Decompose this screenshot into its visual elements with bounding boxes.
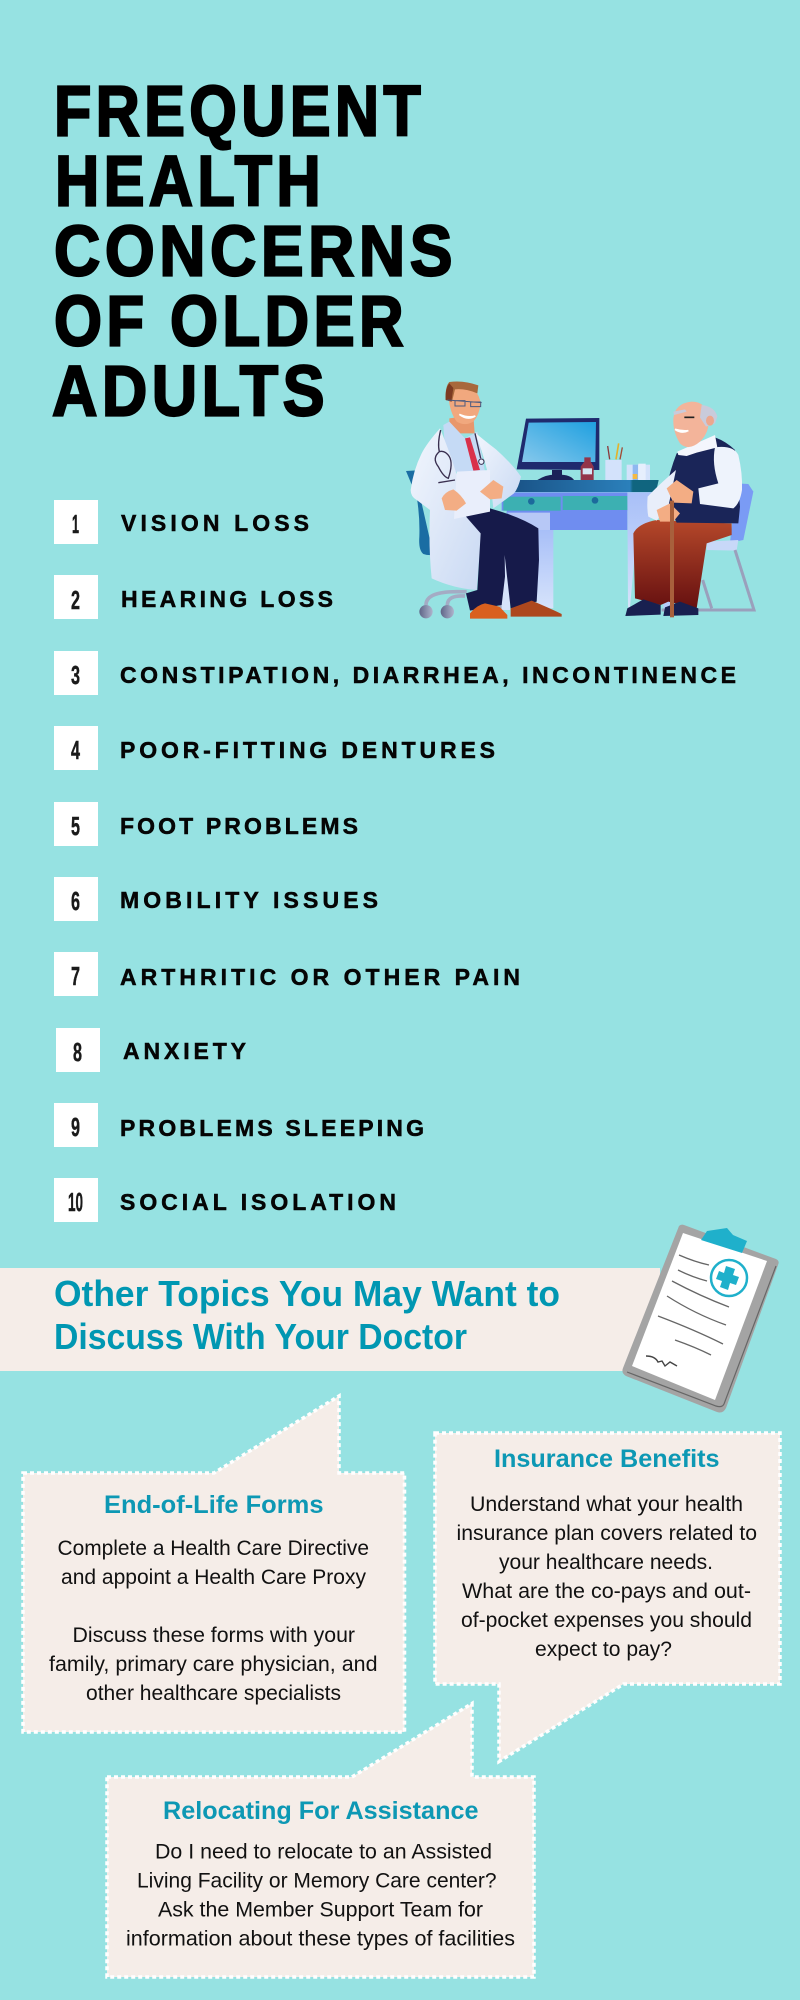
patient <box>625 402 742 617</box>
title: ADULTS <box>52 352 329 432</box>
desk items: bottle, pens, box <box>581 443 650 480</box>
callout body: and appoint a Health Care Proxy <box>61 1566 366 1589</box>
item 1: 1 <box>72 509 79 539</box>
item 4 <box>54 726 495 770</box>
callout body <box>126 1840 515 1950</box>
item 8: 8 <box>73 1037 82 1067</box>
callout body <box>49 1537 378 1705</box>
item 4: POOR-FITTING DENTURES <box>120 737 495 763</box>
title: HEALTH <box>55 142 325 222</box>
callout body: Do I need to relocate to an Assisted <box>155 1840 492 1864</box>
title: FREQUENT <box>54 72 425 152</box>
title: CONCERNS <box>54 212 457 292</box>
callout body: Complete a Health Care Directive <box>58 1537 369 1560</box>
banner heading: Discuss With Your Doctor <box>54 1316 467 1357</box>
item 1: VISION LOSS <box>121 510 309 536</box>
callout: relocating for assistance <box>107 1704 534 1977</box>
doctor's chair <box>406 470 506 618</box>
callout heading: Insurance Benefits <box>494 1445 720 1473</box>
banner heading: Other Topics You May Want to <box>54 1273 560 1314</box>
callout body: expect to pay? <box>535 1638 672 1661</box>
callout: end-of-life forms <box>23 1396 404 1732</box>
item 10: 10 <box>68 1187 83 1217</box>
callout body: your healthcare needs. <box>499 1551 713 1574</box>
callout body: other healthcare specialists <box>86 1682 341 1705</box>
item 3 <box>54 651 736 695</box>
item 3: 3 <box>71 660 80 690</box>
item 2: HEARING LOSS <box>121 586 333 612</box>
callout body: Ask the Member Support Team for <box>158 1898 483 1922</box>
item 8: ANXIETY <box>123 1038 246 1064</box>
illustration: doctor and older patient at a desk <box>406 381 754 619</box>
doctor <box>411 381 562 619</box>
item 5 <box>54 802 358 846</box>
item 1 <box>54 500 309 544</box>
callout body: information about these types of facilities <box>126 1928 515 1950</box>
list of ten health concerns <box>54 500 736 1222</box>
item 8 <box>56 1028 246 1072</box>
monitor <box>517 418 599 480</box>
callout body: What are the co-pays and out- <box>462 1580 751 1603</box>
callout heading: End-of-Life Forms <box>104 1491 324 1519</box>
item 7: ARTHRITIC OR OTHER PAIN <box>120 964 520 990</box>
banner: other topics <box>0 1268 660 1371</box>
callout body: family, primary care physician, and <box>49 1653 378 1676</box>
desk <box>502 480 659 610</box>
item 10 <box>54 1178 396 1222</box>
callout body <box>456 1493 757 1661</box>
icon: clipboard <box>622 1225 779 1412</box>
item 2 <box>54 575 333 619</box>
item 2: 2 <box>71 585 80 615</box>
item 7: 7 <box>71 961 80 991</box>
item 9: PROBLEMS SLEEPING <box>120 1115 424 1141</box>
item 5: 5 <box>71 811 80 841</box>
item 3: CONSTIPATION, DIARRHEA, INCONTINENCE <box>120 662 736 688</box>
patient's chair <box>662 483 754 610</box>
item 5: FOOT PROBLEMS <box>120 813 358 839</box>
item 4: 4 <box>71 735 80 765</box>
callout: insurance benefits <box>435 1433 780 1762</box>
callout body: Understand what your health <box>470 1493 743 1516</box>
item 6: 6 <box>71 886 80 916</box>
title: OF OLDER <box>54 282 408 362</box>
title <box>52 72 457 432</box>
callout body: of-pocket expenses you should <box>461 1609 752 1632</box>
item 9: 9 <box>71 1112 80 1142</box>
item 10: SOCIAL ISOLATION <box>120 1189 396 1215</box>
item 6 <box>54 877 378 921</box>
banner heading <box>54 1273 560 1357</box>
item 7 <box>54 952 520 996</box>
item 6: MOBILITY ISSUES <box>120 887 378 913</box>
callout heading: Relocating For Assistance <box>163 1797 479 1825</box>
callout body: insurance plan covers related to <box>456 1522 757 1545</box>
item 9 <box>54 1103 424 1147</box>
callout body: Living Facility or Memory Care center? <box>137 1870 496 1892</box>
callout body: Discuss these forms with your <box>72 1624 355 1647</box>
